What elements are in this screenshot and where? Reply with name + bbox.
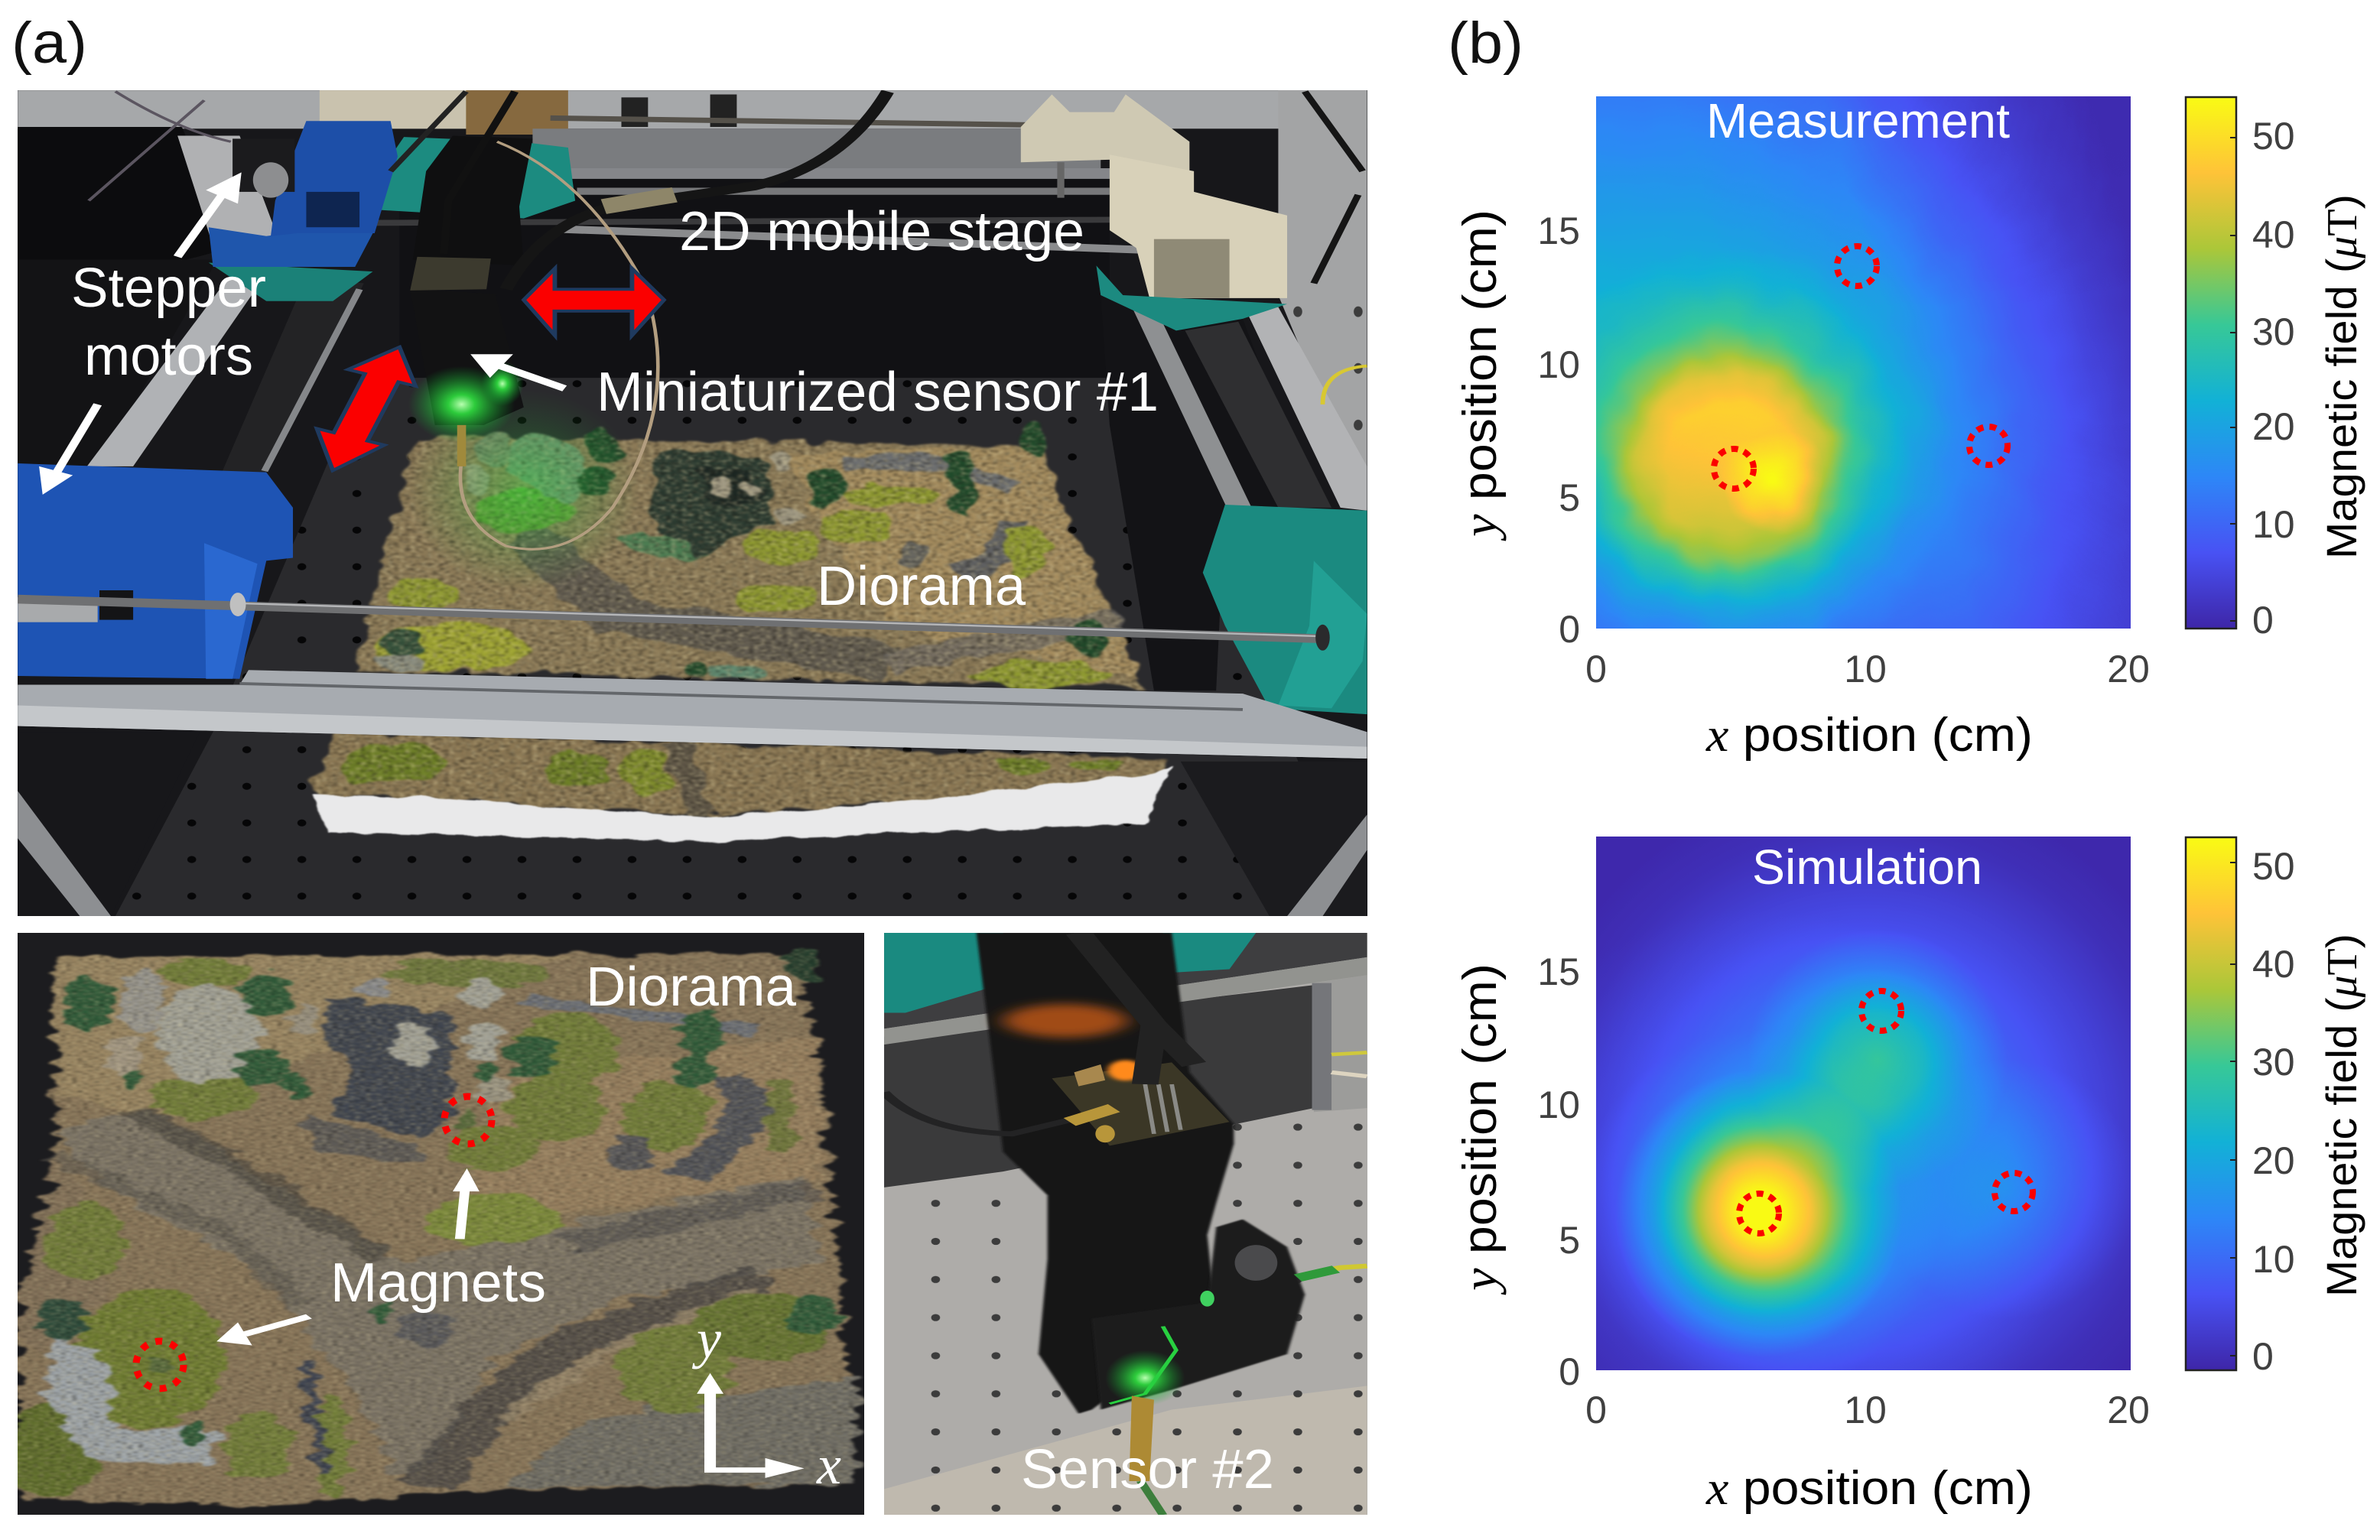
photo: 2D mobile stage over diorama — [0, 83, 1392, 927]
colorbar ticks: measurement: 20 — [2252, 405, 2295, 448]
double arrow: horizontal — [524, 268, 664, 335]
colorbar ticks: simulation: 10 — [2252, 1238, 2295, 1281]
colorbar ticks: measurement: 40 — [2252, 213, 2295, 256]
photo: sensor close-up — [879, 930, 1376, 1517]
label: miniaturized sensor #1: Miniaturized sensor #1 — [597, 362, 1159, 423]
colorbar label: simulation: Magnetic field (μT) — [2317, 934, 2366, 1297]
y axis label: measurement: y position (cm) — [1454, 210, 1507, 541]
magnet markers: measurement — [1714, 246, 2008, 489]
x tick labels: measurement: 0 — [1585, 648, 1607, 690]
label: stepper motors: Stepper — [71, 258, 266, 319]
y tick labels: simulation: 5 — [1559, 1219, 1580, 1262]
colorbar ticks: simulation: 30 — [2252, 1041, 2295, 1084]
label: sensor #2: Sensor #2 — [1021, 1439, 1274, 1500]
arrow: magnet upper — [453, 1168, 480, 1239]
x axis label: simulation: x position (cm) — [1705, 1462, 2033, 1515]
heading: measurement: Measurement — [1706, 93, 2010, 148]
panel label (b): (b) — [1448, 11, 1523, 76]
stage rods and blocks — [18, 95, 1367, 714]
label: axis x: x — [816, 1434, 841, 1496]
label: diorama lower: Diorama — [586, 957, 797, 1018]
styrofoam base — [311, 766, 1172, 841]
magnet markers: simulation — [1739, 991, 2033, 1233]
x tick labels: simulation — [1585, 1389, 2150, 1431]
y tick labels: simulation: 10 — [1537, 1084, 1580, 1126]
colorbar: measurement — [2186, 97, 2236, 629]
y tick labels: measurement: 15 — [1537, 210, 1580, 252]
y tick labels: simulation: 0 — [1559, 1350, 1580, 1393]
colorbar ticks: measurement: 30 — [2252, 310, 2295, 353]
x tick labels: simulation: 20 — [2107, 1389, 2150, 1431]
y tick labels: measurement: 10 — [1537, 343, 1580, 386]
colorbar ticks: measurement: 10 — [2252, 503, 2295, 546]
y tick labels: measurement — [1537, 210, 1580, 651]
colorbar ticks: measurement: 0 — [2252, 599, 2274, 642]
arrow: stepper motor bottom — [39, 404, 98, 495]
x tick labels: measurement: 20 — [2107, 648, 2150, 690]
x tick labels: simulation: 0 — [1585, 1389, 1607, 1431]
arrow: magnet lower — [216, 1317, 309, 1345]
y tick labels: simulation — [1537, 950, 1580, 1393]
y tick labels: measurement: 0 — [1559, 608, 1580, 651]
heatmap: measurement — [1453, 61, 2172, 765]
heading: simulation: Simulation — [1752, 840, 1982, 895]
label: axis y: y — [691, 1308, 721, 1369]
arrow: miniaturized sensor — [470, 354, 564, 388]
sensor module — [391, 92, 888, 549]
y axis label: simulation: y position (cm) — [1454, 963, 1507, 1295]
double arrow: depth — [317, 347, 415, 470]
panel label (a): (a) — [11, 11, 87, 76]
x tick labels: measurement: 10 — [1844, 648, 1887, 690]
axes arrows — [697, 1373, 805, 1478]
colorbar ticks: measurement: 50 — [2252, 115, 2295, 158]
colorbar ticks: simulation: 0 — [2252, 1335, 2274, 1378]
x tick labels: simulation: 10 — [1844, 1389, 1887, 1431]
label: magnets: Magnets — [330, 1252, 546, 1314]
label: 2D mobile stage: 2D mobile stage — [679, 201, 1084, 262]
label: stepper motors — [71, 258, 266, 387]
photo: diorama from above — [0, 918, 888, 1540]
arrow: stepper motor top — [177, 172, 242, 257]
colorbar ticks: simulation: 40 — [2252, 943, 2295, 986]
label: diorama upper: Diorama — [817, 556, 1026, 617]
stage diorama — [311, 423, 1172, 814]
colorbar ticks: simulation — [2252, 845, 2295, 1378]
y tick labels: simulation: 15 — [1537, 950, 1580, 993]
x tick labels: measurement — [1585, 648, 2150, 690]
x axis label: measurement: x position (cm) — [1705, 709, 2033, 762]
colorbar ticks: simulation: 20 — [2252, 1139, 2295, 1182]
colorbar ticks: simulation: 50 — [2252, 845, 2295, 888]
magnet marker lower — [136, 1341, 184, 1389]
y tick labels: measurement: 5 — [1559, 476, 1580, 519]
colorbar ticks: measurement — [2252, 115, 2295, 642]
colorbar label: measurement: Magnetic field (μT) — [2317, 194, 2366, 559]
label: stepper motors: motors — [84, 326, 253, 387]
colorbar: simulation — [2186, 837, 2236, 1370]
heatmap: simulation — [1453, 688, 2294, 1529]
magnet marker upper — [444, 1097, 492, 1144]
